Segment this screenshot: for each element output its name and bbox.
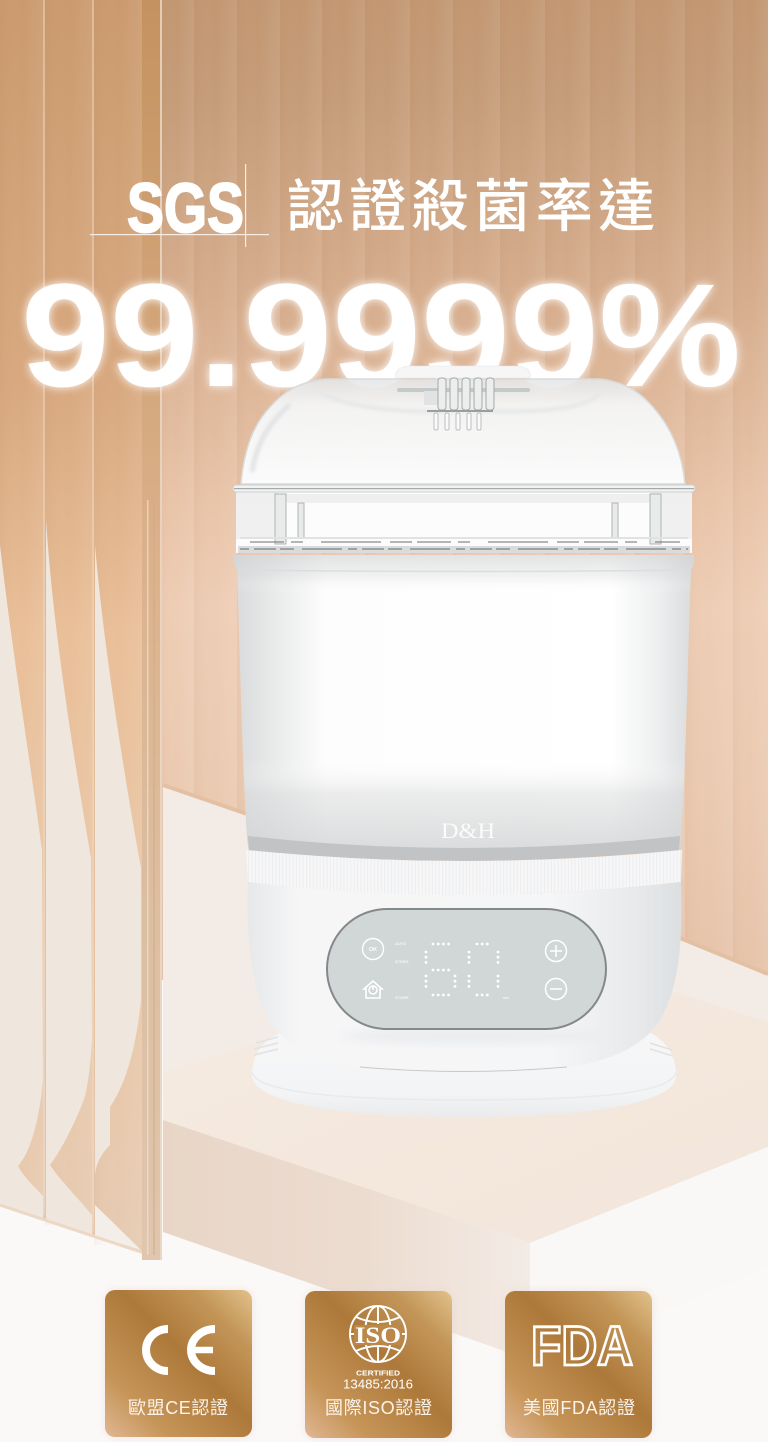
display: LED digit 6 (426, 944, 455, 995)
curtain: pale lower pleat 3 (95, 545, 141, 1175)
curtain: pale lower pleat 2 (46, 520, 92, 1237)
curtain: pale lower pleat 1 (0, 545, 43, 1220)
display: mode labels: STORE (395, 995, 409, 1000)
panel: foreground sheer curtain (0, 0, 162, 1260)
product: ribbed collar (246, 850, 682, 895)
badge label: 美國FDA認證 (523, 1398, 635, 1418)
icon: CE mark (146, 1329, 215, 1371)
curtain: pleat highlights (44, 0, 93, 1232)
icon: ISO globe: ISO (355, 1323, 401, 1348)
badge label: 歐盟CE認證 (128, 1398, 228, 1418)
background: plinth top surface (163, 992, 768, 1243)
product: foot plate (252, 1025, 676, 1117)
badge label: 國際ISO認證 (325, 1398, 432, 1418)
display: mode labels: min (503, 996, 509, 1000)
display: mode labels (395, 941, 509, 1000)
product: frosted main body (234, 555, 694, 861)
product: clear basket (236, 491, 692, 553)
badge: standard number: 13485:2016 (343, 1376, 413, 1392)
badge: ISO certification (305, 1291, 452, 1438)
curtain: hem (0, 1205, 162, 1259)
panel: control display (327, 909, 606, 1029)
display: mode labels: AUTO (395, 941, 406, 946)
icon: power house (364, 981, 382, 998)
display: LED digit 0 (469, 944, 498, 995)
product: transparent dome lid (241, 379, 685, 484)
display: mode labels: STERIL (395, 959, 410, 964)
background: plinth right face (530, 1147, 768, 1368)
icon: ok button (362, 938, 384, 960)
product: valve coil (397, 378, 530, 430)
product: lid knob (396, 366, 530, 378)
product: brand mark: D&H (441, 818, 495, 843)
icon: FDA logo: FDA (531, 1314, 633, 1377)
curtain: pale hem corner (95, 1205, 141, 1250)
product: white base (248, 882, 682, 1072)
badge: FDA certification (505, 1291, 652, 1438)
background: pleated back curtain (160, 0, 768, 980)
icon: minus button (546, 978, 566, 1000)
icon: plus button (546, 940, 566, 962)
badge: CE certification (105, 1290, 252, 1437)
product: water line (248, 836, 680, 861)
icon: ISO globe (350, 1306, 406, 1362)
heading: certification line: 認證殺菌率達 (287, 161, 655, 243)
product: bottle sterilizer (233, 366, 695, 1117)
background: plinth left face (163, 1120, 530, 1360)
icon: ok button: OK (369, 947, 377, 953)
curtain: vertical edge strip (142, 0, 162, 1260)
background: back step of the plinth (163, 785, 768, 1100)
product: lid rim (233, 485, 695, 492)
headline number: 99.9999% (21, 254, 741, 418)
badge: certified text: CERTIFIED (356, 1368, 401, 1378)
heading: SGS mark: SGS (127, 169, 244, 247)
